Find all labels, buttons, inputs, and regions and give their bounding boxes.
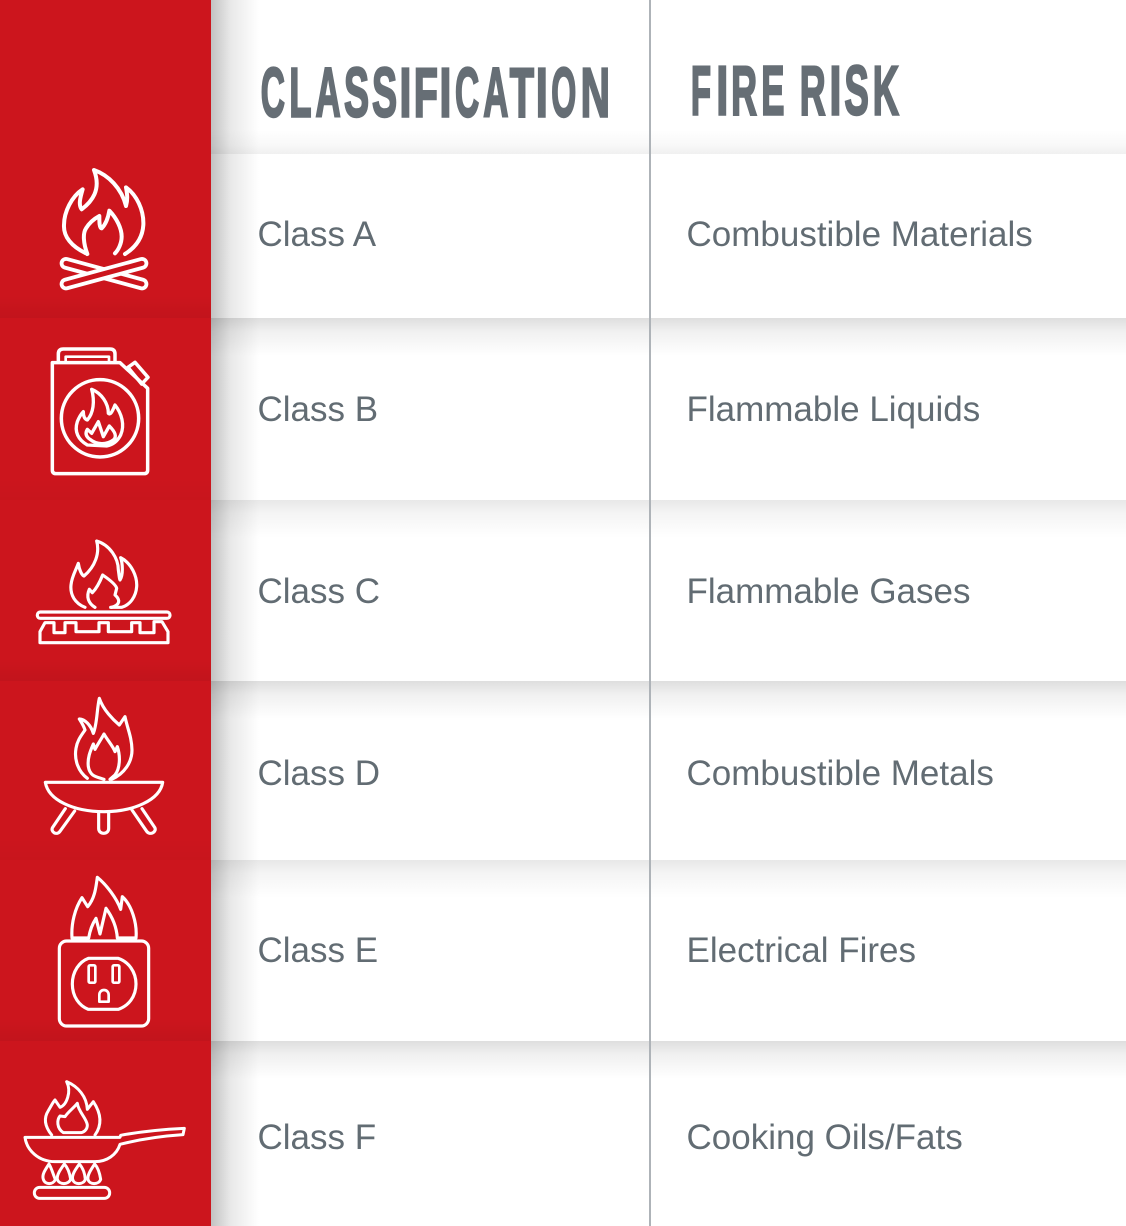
icon: fuel can (52, 349, 148, 474)
label: flammable gases: Flammable Gases (686, 572, 970, 611)
icon: fire pit (45, 698, 163, 833)
label: class D: Class D (258, 754, 380, 793)
heading: classification: C (261, 54, 285, 132)
heading: classification: C (455, 54, 479, 132)
row: class D (45, 698, 994, 833)
heading: classification: F (414, 54, 438, 132)
heading: fire risk: S (844, 52, 869, 130)
heading: classification: O (551, 54, 576, 132)
heading: fire risk: F (691, 52, 711, 130)
heading: fire risk (691, 52, 899, 130)
heading: classification: S (344, 54, 369, 132)
label: combustible metals: Combustible Metals (686, 754, 994, 793)
column divider (649, 0, 651, 1226)
row: class B (52, 349, 980, 474)
heading: classification (261, 54, 610, 132)
row shadows (211, 130, 1126, 1079)
row: class C (37, 541, 970, 643)
heading: classification: I (536, 54, 548, 132)
icon: gas burner (37, 541, 170, 643)
label: class E: Class E (258, 931, 378, 970)
label: class B: Class B (258, 390, 378, 429)
heading: fire risk: K (873, 52, 899, 130)
label: class C: Class C (258, 572, 380, 611)
heading: classification: I (399, 54, 412, 132)
heading: fire risk: I (716, 52, 728, 130)
heading: fire risk: I (829, 52, 842, 130)
heading: fire risk: E (761, 52, 784, 130)
heading: classification: A (316, 54, 341, 132)
label: class A: Class A (258, 215, 377, 254)
heading: fire risk: R (731, 52, 757, 130)
label: flammable liquids: Flammable Liquids (686, 390, 980, 429)
red sidebar (0, 0, 259, 1226)
label: electrical fires: Electrical Fires (686, 931, 916, 970)
label: class F: Class F (258, 1118, 376, 1157)
row: class F (25, 1082, 963, 1198)
label: cooking oils and fats: Cooking Oils/Fats (686, 1118, 963, 1157)
heading: fire risk: R (800, 52, 826, 130)
heading: classification: A (483, 54, 508, 132)
icon: campfire (64, 170, 143, 284)
icon: electrical outlet fire (59, 877, 149, 1026)
row: class A (64, 170, 1033, 284)
heading: classification: T (510, 54, 534, 132)
row: class E (59, 877, 916, 1026)
heading: classification: S (372, 54, 397, 132)
heading: classification: N (581, 54, 610, 132)
icon: frying pan on burner (25, 1082, 184, 1198)
heading: classification: L (289, 54, 312, 132)
label: combustible materials: Combustible Materials (686, 215, 1033, 254)
heading: classification: I (439, 54, 452, 132)
